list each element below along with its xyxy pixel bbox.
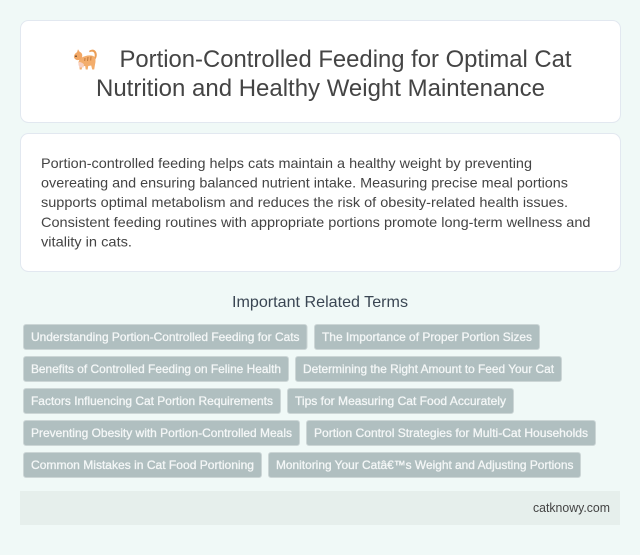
panel: related terms tags	[24, 324, 596, 478]
title text	[96, 46, 572, 102]
tag	[296, 356, 562, 382]
tag	[24, 420, 300, 446]
description text: overeating and ensuring balanced nutrient intake. Measuring precise meal portions	[41, 175, 568, 191]
tag	[24, 356, 288, 382]
footer source text: catknowy.com	[533, 500, 610, 515]
panel: title card	[20, 20, 620, 122]
title text: Nutrition and Healthy Weight Maintenance	[96, 75, 545, 102]
title text: Portion-Controlled Feeding for Optimal Cat	[120, 46, 572, 73]
footer	[20, 491, 620, 525]
tag	[24, 452, 262, 478]
tag: Common Mistakes in Cat Food Portioning	[31, 458, 254, 472]
heading: related terms: Important Related Terms	[232, 294, 408, 311]
tag: Tips for Measuring Cat Food Accurately	[295, 394, 506, 408]
panel: description card	[20, 134, 620, 272]
tag: Factors Influencing Cat Portion Requirements	[31, 394, 273, 408]
description text: Consistent feeding routines with appropriate portions promote long-term wellness and	[41, 214, 590, 230]
tag	[24, 324, 307, 350]
tag: Preventing Obesity with Portion-Controlled Meals	[31, 426, 292, 440]
tag: Understanding Portion-Controlled Feeding for Cats	[31, 330, 300, 344]
description text	[41, 155, 590, 249]
tag: Benefits of Controlled Feeding on Feline Health	[31, 362, 281, 376]
tag	[24, 388, 280, 414]
tag	[306, 420, 596, 446]
description text: supports optimal metabolism and reduces the risk of obesity-related health issues.	[41, 194, 568, 210]
description text: vitality in cats.	[41, 233, 132, 249]
tag: Portion Control Strategies for Multi-Cat Households	[314, 426, 588, 440]
tag	[268, 452, 580, 478]
description text: Portion-controlled feeding helps cats maintain a healthy weight by preventing	[41, 155, 532, 171]
icon: cat	[74, 49, 97, 70]
tag	[288, 388, 514, 414]
tag: The Importance of Proper Portion Sizes	[322, 330, 532, 344]
tag	[314, 324, 540, 350]
tag: Monitoring Your Catâ€™s Weight and Adjusting Portions	[276, 458, 574, 472]
tag: Determining the Right Amount to Feed Your Cat	[303, 362, 555, 376]
